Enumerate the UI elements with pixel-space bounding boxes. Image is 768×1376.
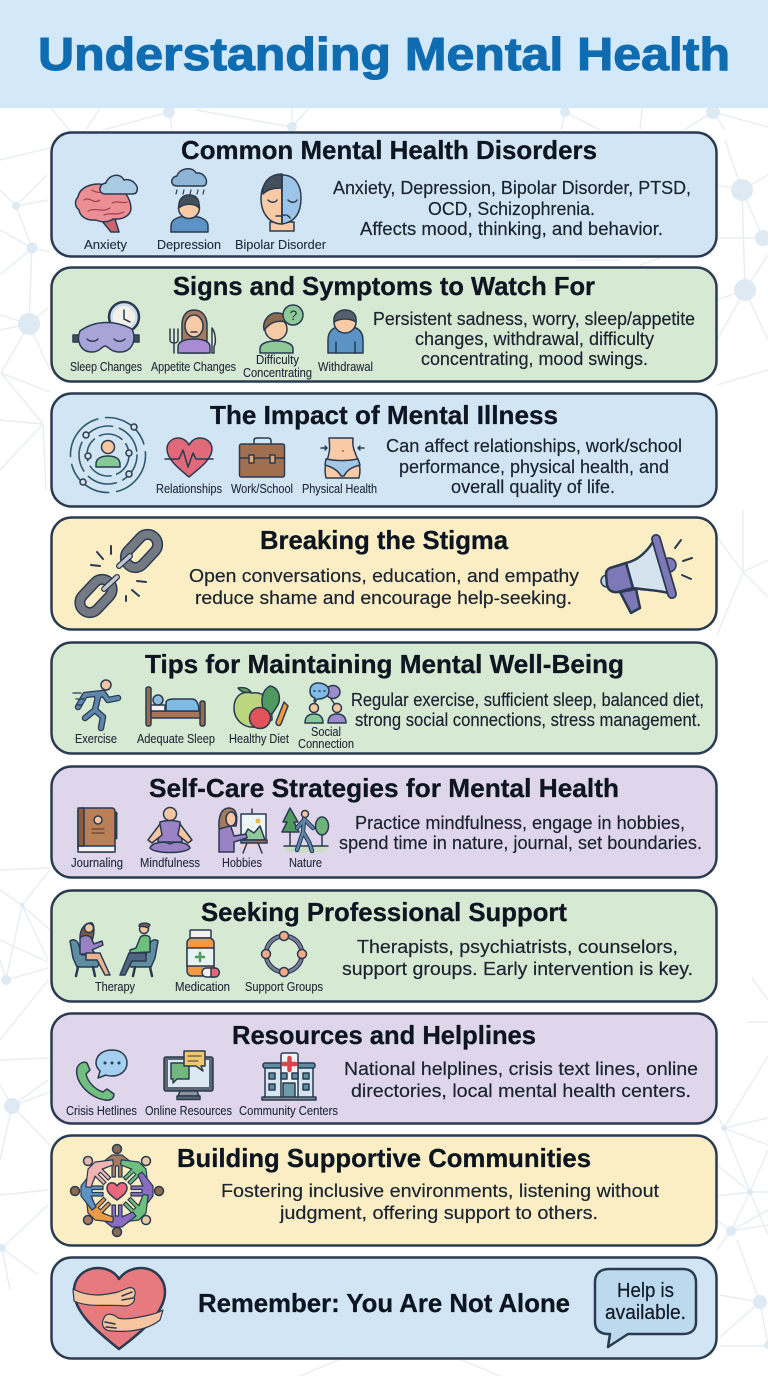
label: Difficulty xyxy=(256,353,300,367)
callout: help is available: Help is xyxy=(617,1280,674,1302)
label: Connection xyxy=(298,737,354,751)
icon: woman with cutlery xyxy=(170,310,215,353)
label: Hobbies xyxy=(222,856,262,870)
description: judgment, offering support to others. xyxy=(279,1202,598,1223)
panel: supportive communities xyxy=(52,1136,716,1246)
label: Adequate Sleep xyxy=(137,732,215,746)
label: Anxiety xyxy=(84,238,128,252)
label: Relationships xyxy=(156,482,222,496)
icon: meditation xyxy=(148,808,192,852)
label: Depression xyxy=(157,238,221,252)
icon: social connection xyxy=(305,683,346,723)
description: directories, local mental health centers. xyxy=(351,1080,691,1101)
description: Can affect relationships, work/school xyxy=(386,435,682,456)
icon: withdrawn person xyxy=(328,310,363,353)
icon: healthy food xyxy=(234,686,288,728)
description: Anxiety, Depression, Bipolar Disorder, PTSD, xyxy=(333,177,691,198)
icon: phone and bubble xyxy=(77,1050,127,1100)
description: Persistent sadness, worry, sleep/appetite xyxy=(373,308,695,329)
heading: Building Supportive Communities xyxy=(177,1143,591,1173)
icon: community circle with heart xyxy=(70,1144,164,1236)
label: Social xyxy=(311,725,341,739)
icon: therapy session xyxy=(70,923,158,976)
callout: help is available xyxy=(595,1269,696,1347)
description xyxy=(333,177,691,239)
icon: waist xyxy=(321,438,364,478)
heading: Common Mental Health Disorders xyxy=(181,135,597,165)
description: Regular exercise, sufficient sleep, balanced diet, xyxy=(351,689,704,710)
label xyxy=(243,353,312,380)
description: support groups. Early intervention is key. xyxy=(342,958,693,979)
label: Withdrawal xyxy=(318,360,373,374)
description: changes, withdrawal, difficulty xyxy=(415,328,655,349)
label: Therapy xyxy=(95,980,136,994)
icon: journal xyxy=(78,808,116,852)
panel: tips for well-being xyxy=(52,642,716,754)
label: Concentrating xyxy=(243,366,312,380)
panel: professional support xyxy=(52,890,716,1002)
icon: heart with hugging arms xyxy=(73,1268,165,1349)
callout: help is available: available. xyxy=(605,1302,686,1324)
description: performance, physical health, and xyxy=(399,456,669,477)
icon: split face xyxy=(261,174,301,231)
label: Medication xyxy=(175,980,230,994)
label: Nature xyxy=(289,856,322,870)
description: Practice mindfulness, engage in hobbies, xyxy=(355,812,685,833)
description xyxy=(386,435,682,497)
description: National helplines, crisis text lines, online xyxy=(344,1058,698,1079)
title: Understanding Mental Health xyxy=(38,28,730,80)
label: Online Resources xyxy=(145,1104,232,1118)
description xyxy=(339,812,702,853)
description: OCD, Schizophrenia. xyxy=(428,198,595,219)
icon: runner xyxy=(73,680,118,728)
heading: The Impact of Mental Illness xyxy=(210,400,558,430)
panel: resources and helplines xyxy=(52,1014,716,1124)
description: Fostering inclusive environments, listening without xyxy=(221,1180,659,1201)
description xyxy=(351,689,704,730)
description: spend time in nature, journal, set boundaries. xyxy=(339,832,702,853)
heading: Seeking Professional Support xyxy=(201,897,567,927)
label: Physical Health xyxy=(302,482,377,496)
label: Journaling xyxy=(71,856,123,870)
icon: walking in nature xyxy=(282,808,328,853)
heading: Self-Care Strategies for Mental Health xyxy=(149,773,619,803)
heading: Tips for Maintaining Mental Well-Being xyxy=(145,649,624,679)
panel: common mental health disorders xyxy=(52,132,716,256)
label: Sleep Changes xyxy=(70,360,142,374)
description: concentrating, mood swings. xyxy=(421,348,648,369)
heading: Breaking the Stigma xyxy=(260,525,509,555)
title banner xyxy=(0,0,768,108)
panel: you are not alone xyxy=(52,1258,716,1358)
description xyxy=(373,308,695,369)
label: Work/School xyxy=(231,482,293,496)
icon: briefcase xyxy=(240,438,284,477)
panel: signs and symptoms xyxy=(52,268,716,382)
icon: support group ring xyxy=(262,932,306,976)
description xyxy=(344,1058,698,1101)
icon: rain cloud person xyxy=(171,169,208,232)
heading: Signs and Symptoms to Watch For xyxy=(173,271,595,301)
icon: person in circles xyxy=(70,418,146,492)
description: reduce shame and encourage help-seeking. xyxy=(195,587,572,608)
description xyxy=(189,565,580,608)
icon: brain with cloud xyxy=(76,175,137,232)
icon: medication bottle xyxy=(187,930,219,977)
icon: broken chain xyxy=(76,530,162,617)
icon: confused person xyxy=(260,305,303,353)
panel: self-care strategies xyxy=(52,766,716,878)
description: Affects mood, thinking, and behavior. xyxy=(360,218,663,239)
icon: heart with pulse xyxy=(165,438,213,477)
description: overall quality of life. xyxy=(451,476,615,497)
icon: painting hobby xyxy=(219,808,267,853)
icon: monitor with chat xyxy=(164,1051,213,1100)
panel: breaking the stigma xyxy=(52,518,716,630)
label: Mindfulness xyxy=(140,856,200,870)
description xyxy=(342,936,693,979)
label: Community Centers xyxy=(239,1104,338,1118)
label: Exercise xyxy=(75,732,117,746)
description: strong social connections, stress management. xyxy=(355,709,701,730)
heading: Remember: You Are Not Alone xyxy=(198,1288,570,1318)
icon: confused person: ? xyxy=(290,307,298,323)
description: Therapists, psychiatrists, counselors, xyxy=(357,936,678,957)
heading: Resources and Helplines xyxy=(232,1020,536,1050)
label: Appetite Changes xyxy=(151,360,236,374)
description xyxy=(221,1180,659,1223)
label: Bipolar Disorder xyxy=(235,238,326,252)
label: Crisis Hetlines xyxy=(66,1104,137,1118)
label: Support Groups xyxy=(245,980,323,994)
icon: hospital xyxy=(262,1053,316,1100)
description: Open conversations, education, and empathy xyxy=(189,565,580,586)
icon: bed xyxy=(146,687,205,726)
icon: sleep mask and clock xyxy=(73,302,139,352)
panel: impact of mental illness xyxy=(52,394,716,506)
label xyxy=(298,725,354,751)
icon: megaphone xyxy=(601,538,692,613)
label: Healthy Diet xyxy=(229,732,289,746)
